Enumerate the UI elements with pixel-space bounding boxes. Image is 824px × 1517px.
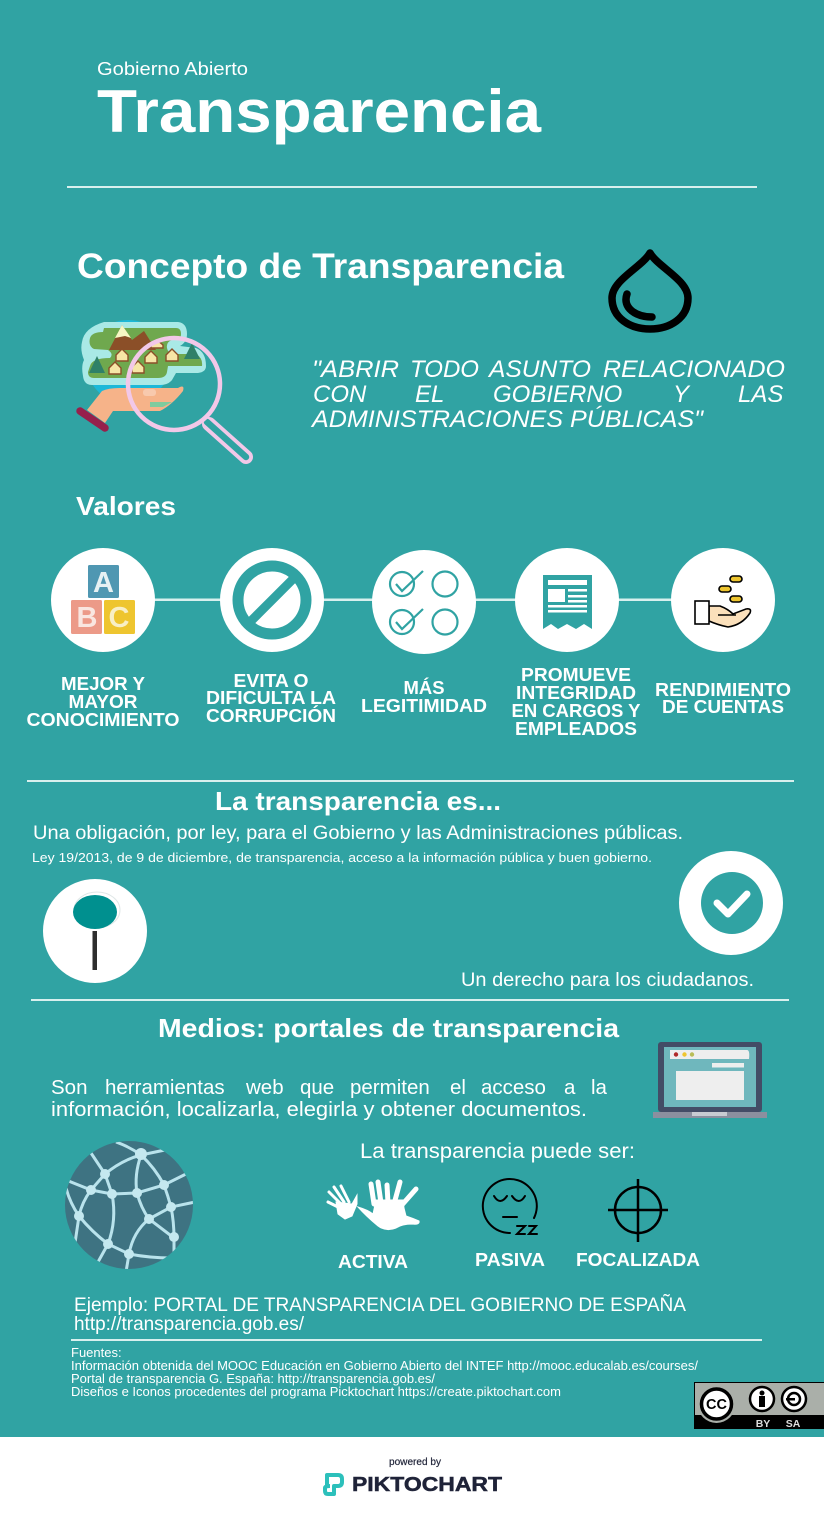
text: ejemplo xyxy=(74,1292,686,1335)
icon: hands xyxy=(328,1182,419,1230)
text: herramientas web: la xyxy=(591,1076,608,1099)
labels: valores: MÁS xyxy=(404,677,444,698)
icon: network globe xyxy=(65,1141,195,1272)
icon: ABC blocks xyxy=(51,548,155,652)
icon: sleeping face xyxy=(483,1179,537,1234)
quote xyxy=(310,356,785,433)
illustration: hand holding village under magnifying glass xyxy=(80,320,246,457)
text: herramientas web: web xyxy=(245,1076,284,1099)
text: fuentes: Fuentes: xyxy=(71,1345,122,1360)
labels: types of transparency: PASIVA xyxy=(475,1250,545,1270)
icon: ABC blocks: C xyxy=(109,602,130,634)
text: derecho: Un derecho para los ciudadanos. xyxy=(461,969,754,991)
quote: TODO xyxy=(410,356,479,383)
icon: crosshair target xyxy=(608,1179,668,1242)
text: obligacion: Una obligación, por ley, para el Gobierno y las Administraciones públicas. xyxy=(33,822,683,844)
heading: medios: Medios: portales de transparencia xyxy=(158,1013,620,1043)
quote: Y xyxy=(673,381,691,408)
badge: creative commons BY SA: SA xyxy=(786,1418,801,1430)
heading: concepto de transparencia: Concepto de Transparencia xyxy=(77,247,565,286)
quote: RELACIONADO xyxy=(603,356,785,383)
labels: valores: LEGITIMIDAD xyxy=(361,696,487,716)
quote: ADMINISTRACIONES PÚBLICAS" xyxy=(310,406,705,433)
icon: checkmark circle xyxy=(679,851,783,955)
text: herramientas web: herramientas xyxy=(105,1076,225,1099)
text: obligacion: Ley 19/2013, de 9 de diciembre, de transparencia, acceso a la información pública y buen gobierno. xyxy=(32,850,652,865)
labels: valores: DE CUENTAS xyxy=(662,697,784,717)
labels: valores: MAYOR xyxy=(68,692,138,712)
badge: creative commons BY SA: CC xyxy=(706,1397,727,1413)
quote: ASUNTO xyxy=(487,356,591,383)
text: obligacion xyxy=(32,822,683,865)
text: fuentes: Diseños e Iconos procedentes del programa Picktochart https://create.piktochart.com xyxy=(71,1384,561,1399)
icon: sign post xyxy=(43,879,147,983)
labels: valores: EN CARGOS Y xyxy=(512,701,640,721)
icon: prohibition sign xyxy=(220,548,324,652)
labels: valores: EMPLEADOS xyxy=(515,719,637,739)
icon: hand with coins xyxy=(671,548,775,652)
quote: CON xyxy=(313,381,367,408)
text: herramientas web xyxy=(51,1076,608,1121)
labels: types of transparency: ACTIVA xyxy=(338,1252,408,1272)
icon: checklist xyxy=(372,550,476,654)
labels: valores: DIFICULTA LA xyxy=(206,688,336,708)
labels: valores: CONOCIMIENTO xyxy=(26,710,180,730)
heading: valores: Valores xyxy=(76,491,176,521)
text: herramientas web: a xyxy=(564,1076,576,1099)
quote: "ABRIR xyxy=(312,356,399,383)
labels: valores: RENDIMIENTO xyxy=(655,680,791,700)
text: ejemplo: http://transparencia.gob.es/ xyxy=(74,1313,305,1335)
labels: types of transparency: FOCALIZADA xyxy=(576,1250,700,1270)
quote: EL xyxy=(415,381,444,408)
text: herramientas web: el xyxy=(450,1076,466,1099)
icon: document receipt xyxy=(515,548,619,652)
icon: ABC blocks: B xyxy=(77,602,97,634)
text: herramientas web: permiten xyxy=(350,1076,430,1099)
labels: valores xyxy=(26,665,791,739)
text: la transparencia puede ser: La transparencia puede ser: xyxy=(360,1140,635,1163)
icon: laptop xyxy=(653,1042,767,1118)
quote: GOBIERNO xyxy=(493,381,622,408)
labels: valores: MEJOR Y xyxy=(61,674,145,694)
quote: LAS xyxy=(738,381,783,408)
text: herramientas web: Son xyxy=(51,1076,87,1099)
text: ejemplo: Ejemplo: PORTAL DE TRANSPARENCIA DEL GOBIERNO DE ESPAÑA xyxy=(74,1292,686,1316)
footer: powered by piktochart: PIKTOCHART xyxy=(352,1474,502,1496)
icon: ABC blocks: A xyxy=(93,567,114,599)
title block: Transparencia xyxy=(97,78,542,145)
text: fuentes: Información obtenida del MOOC Educación en Gobierno Abierto del INTEF http://mooc.educalab.es/courses/ xyxy=(71,1358,698,1373)
title block: Gobierno Abierto xyxy=(97,59,248,79)
heading: la transparencia es: La transparencia es... xyxy=(215,786,501,816)
labels: valores: INTEGRIDAD xyxy=(516,683,636,703)
badge: creative commons BY SA: BY xyxy=(756,1418,770,1430)
footer: powered by piktochart xyxy=(325,1457,502,1496)
icon: water drop xyxy=(612,253,688,329)
badge: creative commons BY SA xyxy=(694,1382,824,1430)
labels: valores: PROMUEVE xyxy=(521,665,631,685)
text: fuentes: Portal de transparencia G. España: http://transparencia.gob.es/ xyxy=(71,1371,435,1386)
footer: powered by piktochart: powered by xyxy=(389,1457,441,1468)
text: herramientas web: acceso xyxy=(481,1076,546,1099)
text: fuentes xyxy=(71,1345,698,1399)
text: herramientas web: que xyxy=(300,1076,334,1099)
labels: valores: CORRUPCIÓN xyxy=(206,705,336,726)
text: herramientas web: información, localizarla, elegirla y obtener documentos. xyxy=(51,1098,587,1121)
labels: types of transparency xyxy=(338,1250,700,1272)
labels: valores: EVITA O xyxy=(234,671,308,691)
